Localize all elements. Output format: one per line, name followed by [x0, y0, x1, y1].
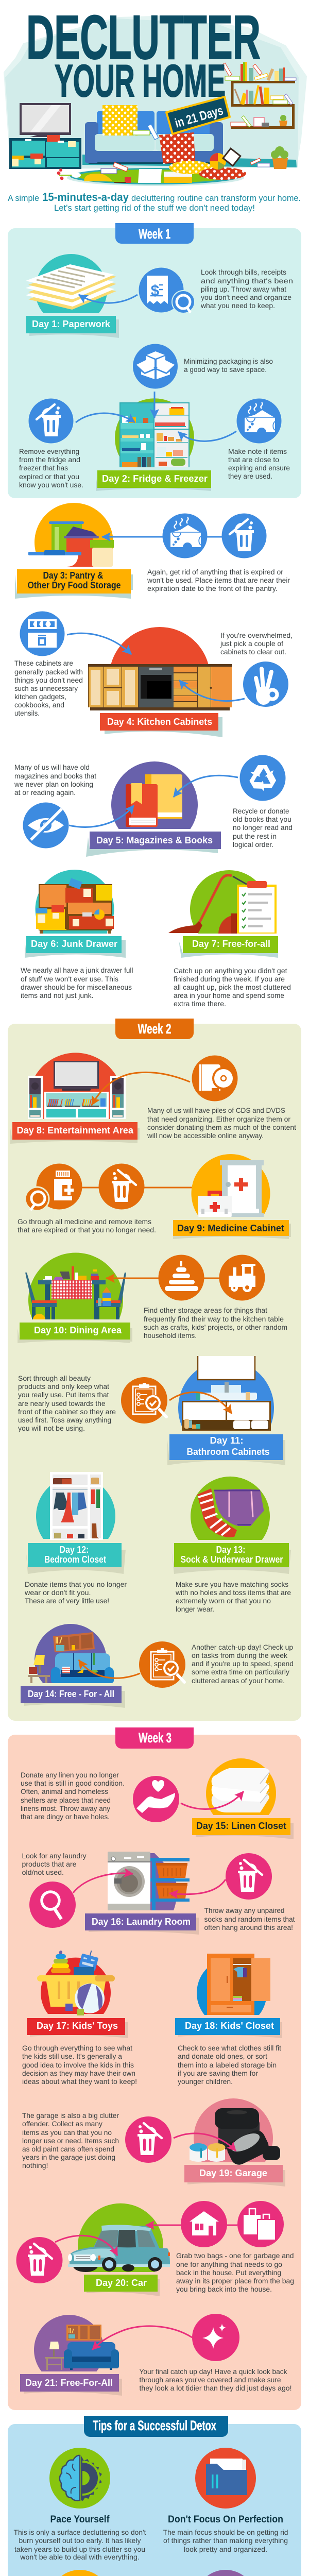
text: day 21: they look a lot tidier than they did just days ago!	[139, 2384, 291, 2392]
text: day 16 left: old/not used.	[22, 1869, 64, 1876]
heading: don't focus on perfection: Don't Focus On Perfection	[168, 2514, 283, 2525]
text: day 8: Many of us will have piles of CDS and DVDS	[147, 1107, 285, 1114]
icon: trash	[99, 1163, 144, 1210]
text: pace yourself: won't be able to deal with everything.	[20, 2553, 140, 2561]
text: day 20	[176, 2252, 294, 2293]
text: day 5 left: at or reading again.	[14, 789, 76, 796]
text: day 11: used first. Toss away anything	[18, 1416, 111, 1424]
day 5 illustration: books	[111, 761, 198, 829]
week 3 tab	[115, 1727, 194, 1749]
icon: trash	[16, 2237, 63, 2283]
text: day 10: household items.	[144, 1332, 197, 1340]
text: day 15: Often, animal and homeless	[21, 1788, 108, 1795]
label: day 10: Day 10: Dining Area	[34, 1325, 122, 1335]
text: day 4 left: These cabinets are	[14, 659, 73, 667]
arrow	[73, 1873, 133, 1893]
text: day 2 right: they are used.	[228, 472, 272, 480]
intro text: 15-minutes-a-day	[42, 191, 129, 204]
icon: house	[181, 2201, 227, 2247]
icon: medicine bottle with magnifier	[25, 1163, 82, 1211]
text: day 2 left: freezer that has	[19, 464, 68, 472]
text: day 17	[22, 2044, 137, 2086]
text: day 4 left: things you don't need	[14, 676, 83, 684]
icon: trash	[226, 1853, 272, 1900]
label: day 6: Day 6: Junk Drawer	[31, 939, 117, 949]
label: day 7: Day 7: Free-for-all	[192, 939, 270, 949]
text: day 1	[200, 268, 293, 310]
text: day 5 right: no longer read and	[233, 824, 293, 832]
text: day 2 right: Make note if items	[228, 448, 287, 455]
text: day 11: Sort through all beauty	[18, 1375, 91, 1382]
icon: spoiled cheese	[237, 399, 281, 443]
text: day 1: Look through bills, receipts	[201, 268, 286, 276]
text: day 16 left	[22, 1852, 87, 1876]
intro text: decluttering routine can transform your home.	[131, 194, 301, 203]
label: day 1	[26, 316, 119, 338]
panel: week 3	[8, 1727, 301, 2410]
text: day 6: items and not just junk.	[21, 992, 94, 999]
text: day 6: drawer should be for miscellaneous	[21, 984, 132, 991]
text: day 18: and donate old ones, or sort	[178, 2053, 267, 2060]
icon: checklist	[121, 1377, 167, 1423]
text: day 11: you really use. Put items that	[18, 1391, 109, 1399]
text: day 5 left: we never plan on looking	[14, 781, 93, 788]
label: day 17	[27, 2018, 128, 2038]
sofa	[85, 111, 223, 164]
text: day 4 left: kitchen gadgets,	[14, 693, 66, 701]
text: day 9	[18, 1218, 156, 1234]
arrow	[79, 1660, 140, 1678]
text: day 7: finished during the week. If you are	[174, 975, 285, 983]
connector and arrow	[106, 1278, 219, 1279]
text: day 5 left	[14, 764, 96, 796]
label: day 5	[86, 832, 221, 857]
arrow	[92, 2326, 192, 2350]
label: day 20	[84, 2275, 160, 2296]
day 16 illustration: laundry room	[108, 1852, 190, 1910]
text: day 12: These are of very little use!	[25, 1597, 109, 1605]
label: day 16: Day 16: Laundry Room	[92, 1917, 191, 1927]
label: day 11: Bathroom Cabinets	[186, 1447, 270, 1457]
label: day 3	[15, 569, 133, 599]
text: day 20: you bring back into the house.	[176, 2285, 272, 2293]
day 6 illustration: junk drawers	[35, 870, 114, 934]
icon: trash	[125, 2116, 171, 2163]
text: day 3	[147, 568, 290, 592]
label: day 14	[21, 1686, 125, 1708]
text: day 16 right	[204, 1907, 295, 1931]
panel: week 2	[8, 1019, 301, 1721]
label: day 21: Day 21: Free-For-All	[25, 2378, 113, 2388]
label: day 5: Day 5: Magazines & Books	[96, 835, 213, 845]
icon: brain and gear	[49, 2448, 110, 2509]
text: day 2 left: Remove everything	[19, 448, 79, 455]
arrow	[174, 775, 238, 797]
text: day 20: away in its proper place from the bag	[176, 2277, 294, 2285]
day 7 illustration: vacuum and checklist	[168, 870, 277, 934]
yellow pillow	[102, 105, 138, 135]
title	[26, 2, 261, 106]
text: day 2 left: from the fridge and	[19, 456, 80, 464]
text: day 16 left: products that are	[22, 1860, 76, 1868]
text: don't focus on perfection: The main focus should be on getting rid	[163, 2529, 288, 2536]
label: day 8: Day 8: Entertainment Area	[16, 1125, 134, 1136]
text: day 5 right: Recycle or donate	[233, 807, 289, 815]
week 3 tab: Week 3	[139, 1730, 171, 1745]
label: day 19	[184, 2165, 285, 2187]
connector and arrow	[146, 2225, 237, 2226]
text: day 10: Find other storage areas for things that	[144, 1307, 267, 1314]
television	[20, 103, 71, 137]
text: day 8	[147, 1107, 296, 1140]
text: day 3: Again, get rid of anything that is expired or	[147, 568, 283, 576]
label: day 15: Day 15: Linen Closet	[196, 1821, 286, 1831]
text: day 3: expiration date to the front of the pantry.	[147, 585, 278, 592]
text: day 15: linens most. Throw away any	[21, 1805, 110, 1812]
day 19 illustration: tires and paint	[190, 2098, 280, 2167]
text: day 15: Donate any linen you no longer	[21, 1771, 119, 1779]
label: day 9	[173, 1220, 291, 1239]
text: day 4 right	[220, 632, 293, 656]
text: day 19: as old paint cans often spend	[22, 2145, 114, 2153]
arrow	[79, 295, 138, 303]
text: day 6	[21, 967, 133, 999]
text: pace yourself: taken years to build up this clutter so you	[14, 2546, 145, 2553]
text: day 17: the kids still use. It's generally a	[22, 2053, 122, 2060]
connector and arrow	[82, 1187, 210, 1188]
label: day 21	[20, 2374, 122, 2396]
label: day 10	[18, 1323, 132, 1343]
week 1 tab: Week 1	[139, 226, 170, 242]
text: day 18: Check to see what clothes still fit	[178, 2044, 281, 2052]
text: day 14: Another catch-up day! Check up	[192, 1643, 293, 1651]
day 10 illustration: dining table	[25, 1252, 126, 1319]
label: day 3: Other Dry Food Storage	[28, 580, 121, 590]
text: day 14	[192, 1643, 294, 1685]
day 4 illustration: kitchen cabinets	[88, 627, 232, 710]
text: day 18: younger children.	[178, 2078, 233, 2086]
text: day 4 left: cookbooks, and	[14, 701, 64, 709]
text: day 7: Catch up on anything you didn't get	[174, 967, 287, 975]
label: day 1: Day 1: Paperwork	[32, 319, 111, 329]
text: day 14: some extra time on particularly	[192, 1668, 289, 1676]
icon: checklist	[139, 1641, 185, 1688]
books on sofa	[133, 124, 159, 140]
text: pace yourself: burn yourself out too early. It has likely	[19, 2537, 141, 2545]
arrow	[102, 536, 163, 538]
text: day 2 left	[19, 448, 83, 489]
text: day 16 right: socks and random items that	[204, 1916, 295, 1923]
label: day 13: Sock & Underwear Drawer	[180, 1554, 283, 1565]
badge: in 21 Days	[166, 97, 230, 134]
text: don't focus on perfection: of things rather than making everything	[163, 2537, 288, 2545]
connector	[207, 536, 222, 538]
text: day 5 left: magazines and books that	[14, 772, 96, 780]
text: day 4 right: just pick a couple of	[220, 640, 283, 648]
arrow	[67, 633, 131, 654]
text: day 18: them into a labeled storage bin	[178, 2061, 277, 2069]
text: day 13: Make sure you have matching socks	[176, 1581, 288, 1588]
label: day 9: Day 9: Medicine Cabinet	[177, 1223, 284, 1233]
text: day 8: will now be accessible online anyway.	[147, 1132, 264, 1140]
text: day 14: and if you're up to speed, spend	[192, 1660, 294, 1668]
text: day 1: you don't need and organize	[201, 294, 291, 301]
day 2 illustration: fridge	[115, 398, 194, 467]
text: day 1: what you need to keep.	[200, 302, 275, 310]
icon: bags	[237, 2201, 284, 2247]
text: day 12	[24, 1581, 127, 1605]
text: day 18	[178, 2044, 281, 2086]
text: day 16 right: often hang around this area!	[204, 1924, 293, 1931]
text: day 13	[175, 1581, 291, 1613]
label: day 11	[167, 1434, 285, 1465]
text: day 2 packaging: a good way to save space.	[184, 366, 267, 374]
header illustration	[0, 15, 309, 190]
arrow	[169, 1879, 226, 1894]
day 14 illustration: cluttered living room	[28, 1624, 114, 1683]
text: day 19: items as you can that you no	[22, 2129, 112, 2137]
icon: disc case	[192, 1055, 238, 1101]
text: day 7: all caught up, pick the most cluttered	[174, 984, 291, 991]
icon: kitchen	[20, 611, 65, 656]
text: day 4 left: such as unnecessary	[14, 685, 78, 692]
text: day 1: piling up. Throw away what	[201, 285, 286, 293]
day 1 illustration: paperwork	[26, 254, 116, 313]
text: day 2 packaging: Minimizing packaging is also	[184, 358, 273, 365]
day 11 illustration: bathroom vanity	[178, 1356, 274, 1431]
text: day 13: extremely worn or that you no	[176, 1597, 271, 1605]
intro text: Let's start getting rid of the stuff we don't need today!	[54, 204, 255, 213]
text: day 12: wear or don't fit you.	[24, 1589, 91, 1597]
label: day 7	[179, 936, 278, 958]
text: day 12: Donate items that you no longer	[25, 1581, 127, 1588]
text: day 21: Your final catch up day! Have a quick look back	[139, 2368, 287, 2376]
icon: folder	[195, 2448, 256, 2509]
week 1 tab	[115, 223, 194, 244]
label: day 16	[85, 1913, 199, 1935]
text: day 3: won't be used. Place items that are near their	[147, 577, 290, 584]
heading: pace yourself: Pace Yourself	[50, 2514, 110, 2525]
floor rug and clutter	[57, 148, 270, 186]
text: day 6: of stuff we won't ever use. This	[21, 975, 118, 983]
day 13 illustration: sock and underwear	[191, 1477, 270, 1540]
label: day 19: Day 19: Garage	[199, 2168, 267, 2178]
text: day 19: years in the garage just doing	[22, 2154, 115, 2161]
label: day 12	[26, 1543, 126, 1574]
text: day 5 right: put the rest in	[233, 833, 277, 840]
arrow	[153, 392, 156, 418]
text: day 2 right: expiring and ensure	[228, 464, 290, 472]
text: day 7: area in your home and spend some	[174, 992, 284, 999]
label: day 4	[100, 713, 222, 737]
icon: sparkle	[192, 2314, 239, 2361]
icon: ok hand	[243, 662, 288, 707]
label: day 2	[96, 470, 211, 491]
arrow	[76, 413, 135, 422]
text: day 17: Go through everything to see what	[22, 2044, 132, 2052]
text: don't focus on perfection	[163, 2529, 288, 2553]
label: day 18	[175, 2018, 282, 2038]
label: day 11: Day 11:	[210, 1435, 243, 1446]
day 15 illustration: towels	[206, 1758, 276, 1815]
icon: magnifier	[29, 1882, 76, 1928]
label: day 20: Day 20: Car	[96, 2278, 147, 2288]
text: day 16 right: Throw away any unpaired	[204, 1907, 284, 1914]
label: day 4: Day 4: Kitchen Cabinets	[107, 717, 212, 727]
text: day 8: that need organizing. Either organize them or	[147, 1115, 290, 1123]
text: day 21	[139, 2368, 291, 2392]
text: day 11	[18, 1375, 116, 1432]
label: day 17: Day 17: Kids' Toys	[37, 2021, 118, 2031]
arrow	[92, 1072, 190, 1105]
floor plant	[271, 146, 288, 169]
text: day 19: nothing!	[22, 2162, 48, 2170]
text: day 7: extra time there.	[174, 1000, 226, 1008]
label: day 15	[192, 1818, 294, 1839]
text: day 19: longer use or need. Items such	[22, 2137, 119, 2145]
text: day 2 right	[228, 448, 290, 480]
day 8 illustration: entertainment unit	[28, 1053, 126, 1119]
text: day 4 right: If you're overwhelmed,	[220, 632, 293, 639]
text: day 15: shelters are places that need	[21, 1797, 111, 1804]
text: day 14: cluttered areas of your home.	[192, 1677, 285, 1685]
icon: hand with heart	[133, 1776, 179, 1822]
icon: stacking toy	[159, 1255, 204, 1300]
label: day 14: Day 14: Free - For - All	[28, 1689, 114, 1699]
text: day 4 left: generally packed with	[14, 668, 83, 676]
text: day 4 left: utensils.	[14, 709, 40, 717]
label: day 12: Day 12:	[60, 1545, 89, 1555]
icon: boxes	[133, 344, 178, 388]
text: don't focus on perfection: look pretty and organized.	[184, 2546, 267, 2553]
text: day 17: decision as they may have their own	[22, 2070, 135, 2077]
icon: eye crossed	[23, 803, 69, 848]
day 3 illustration: pantry containers	[28, 503, 114, 567]
text: day 6: We nearly all have a junk drawer full	[21, 967, 133, 974]
intro text: A simple	[8, 194, 39, 203]
text: pace yourself	[13, 2529, 146, 2561]
day 21 illustration: tidy living room	[34, 2315, 119, 2371]
week 2 tab: Week 2	[138, 1021, 171, 1037]
tips tab: Tips for a Successful Detox	[93, 2418, 216, 2433]
text: day 5 right: old books that you	[233, 816, 291, 823]
text: day 14: on tasks from during the week	[192, 1652, 287, 1659]
text: pace yourself: This is only a surface decluttering so don't	[13, 2529, 146, 2536]
text: day 19	[22, 2112, 119, 2170]
week 2 tab	[115, 1019, 194, 1039]
text: day 2 packaging	[184, 358, 273, 374]
text: day 2 left: expired or that you	[19, 473, 79, 481]
text: day 17: ideas about what they want to keep!	[22, 2078, 137, 2086]
arrow	[69, 805, 134, 827]
text: day 20: one for anything that needs to go	[176, 2261, 282, 2268]
text: day 10	[144, 1307, 287, 1340]
text: day 15	[21, 1771, 125, 1821]
label: day 2: Day 2: Fridge & Freezer	[102, 473, 208, 484]
text: day 15: use that is still in good condition.	[21, 1780, 125, 1787]
text: day 16 left: Look for any laundry	[22, 1852, 87, 1860]
day 18 illustration: kids closet	[197, 1954, 270, 2015]
arrow	[181, 1791, 244, 1809]
intro text	[8, 191, 301, 213]
icon: receipt with magnifier: $	[151, 282, 160, 299]
label: day 13: Day 13:	[216, 1545, 245, 1555]
text: day 4 left	[14, 659, 83, 717]
text: day 5 right: logical order.	[233, 841, 273, 849]
text: day 10: such as crafts, kids' projects, or other random	[144, 1324, 287, 1331]
text: day 17: good idea to involve the kids in this	[22, 2061, 134, 2069]
text: day 2 right: that are close to	[228, 456, 279, 464]
text: day 5 left: Many of us will have old	[14, 764, 90, 771]
label: day 18: Day 18: Kids' Closet	[185, 2021, 274, 2031]
icon: trash	[29, 399, 73, 443]
label: day 12: Bedroom Closet	[44, 1554, 106, 1565]
text: day 11: you will not be using.	[18, 1425, 85, 1432]
tv cabinet	[9, 135, 81, 169]
icon: toy train	[219, 1255, 265, 1300]
label: day 8	[10, 1122, 140, 1144]
arrow	[179, 680, 245, 701]
icon: receipt with magnifier	[139, 268, 195, 313]
text: day 9: that are expired or that you no longer need.	[18, 1226, 156, 1234]
text: day 2 left: know you won't use.	[19, 481, 83, 489]
text: day 21: through areas you've covered and make sure	[139, 2376, 281, 2384]
text: day 11: are nearly used towards the	[18, 1400, 105, 1408]
text: day 20: Grab two bags - one for garbage and	[176, 2252, 294, 2260]
icon: trash	[221, 513, 267, 558]
text: day 13: longer wear.	[176, 1605, 214, 1613]
day 17 illustration: toys	[37, 1948, 115, 2015]
text: day 5 right	[233, 807, 293, 849]
tips tab	[84, 2416, 228, 2437]
panel: week 1	[8, 223, 301, 1008]
arrow	[178, 431, 236, 441]
panel: tips	[8, 2416, 301, 2576]
text: day 9: Go through all medicine and remove items	[18, 1218, 151, 1226]
badge: in 21 Days: in 21 Days	[174, 103, 225, 131]
text: day 19: The garage is also a big clutter	[22, 2112, 119, 2120]
icon: spoiled cheese	[163, 513, 207, 558]
day 12 illustration: bedroom closet	[36, 1472, 115, 1540]
text: day 4 right: cabinets to clear out.	[220, 648, 286, 656]
text: day 11: products and only keep what	[18, 1383, 109, 1391]
label: day 3: Day 3: Pantry &	[43, 570, 103, 581]
icon: recycle	[240, 755, 285, 801]
wall shelves with books	[222, 62, 296, 129]
text: day 10: frequently find their way to the kitchen table	[144, 1315, 284, 1323]
arrow	[174, 2133, 236, 2151]
text: day 19: offender. Collect as many	[22, 2120, 102, 2128]
day 20 illustration: car	[68, 2204, 170, 2272]
text: day 18: if you are saving them for	[178, 2070, 258, 2077]
text: day 13: with no holes and toss items that are	[175, 1589, 291, 1597]
red pillow	[159, 132, 195, 164]
day 9 illustration: medicine cabinet	[192, 1154, 270, 1217]
text: day 11: front of the cabinet so they are	[18, 1408, 116, 1416]
icon: timer clock	[195, 2570, 256, 2576]
text: day 7	[174, 967, 291, 1008]
text: day 20: back in the house. Put everything	[176, 2269, 281, 2277]
text: day 15: that are dingy or have holes.	[21, 1813, 110, 1821]
text: day 8: consider donating them as much of the content	[147, 1124, 296, 1131]
text: day 1: and anything that's been	[201, 277, 293, 285]
label: day 13	[171, 1543, 291, 1574]
icon: flexible gear	[49, 2570, 110, 2576]
arrow	[55, 2235, 117, 2256]
arrow	[169, 1392, 232, 1414]
label: day 6	[25, 936, 126, 958]
